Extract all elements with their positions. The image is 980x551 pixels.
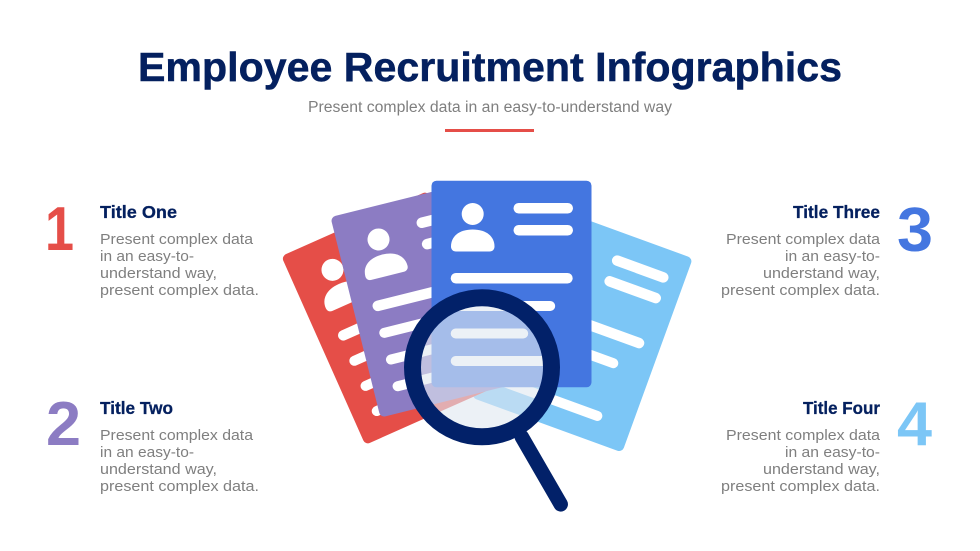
subtitle: Present complex data in an easy-to-understand way [308, 99, 672, 116]
text: item one body: Present complex data [100, 231, 254, 248]
text: item three body: present complex data. [721, 282, 880, 299]
heading: title three: Title Three [793, 202, 880, 222]
text: item one body [100, 231, 259, 299]
block: item four [721, 390, 933, 495]
number 2: 2 [46, 390, 81, 459]
heading: title four: Title Four [803, 398, 880, 418]
text: item two body: Present complex data [100, 427, 254, 444]
icon: blue resume [432, 181, 592, 387]
illustration: resumes under magnifying glass [281, 178, 693, 504]
text: item three body: Present complex data [726, 231, 881, 248]
text: item three body [721, 231, 881, 299]
heading: title two: Title Two [100, 398, 173, 418]
text: item two body: understand way, [100, 461, 217, 478]
icon: purple resume [332, 192, 502, 416]
title underline [445, 129, 534, 132]
number 3: 3 [897, 196, 933, 265]
icon: magnifying glass [412, 298, 561, 504]
block: item three [721, 196, 933, 299]
block: item two [46, 390, 259, 495]
text: item four body: present complex data. [721, 478, 880, 495]
number 1: 1 [45, 195, 74, 264]
number 4: 4 [897, 390, 933, 459]
icon: light blue resume [472, 204, 693, 452]
text: item four body: Present complex data [726, 427, 881, 444]
text: item four body [721, 427, 881, 495]
text: item one body: in an easy-to- [100, 248, 194, 265]
text: item four body: understand way, [763, 461, 880, 478]
text: item two body: in an easy-to- [100, 444, 194, 461]
text: item three body: in an easy-to- [785, 248, 880, 265]
text: item one body: understand way, [100, 265, 217, 282]
heading: title one: Title One [100, 202, 177, 222]
icon: red resume [281, 191, 511, 445]
text: item three body: understand way, [763, 265, 880, 282]
text: item two body [100, 427, 259, 495]
block: item one [45, 195, 259, 299]
title: Employee Recruitment Infographics [138, 44, 842, 90]
text: item one body: present complex data. [100, 282, 259, 299]
text: item four body: in an easy-to- [785, 444, 880, 461]
text: item two body: present complex data. [100, 478, 259, 495]
